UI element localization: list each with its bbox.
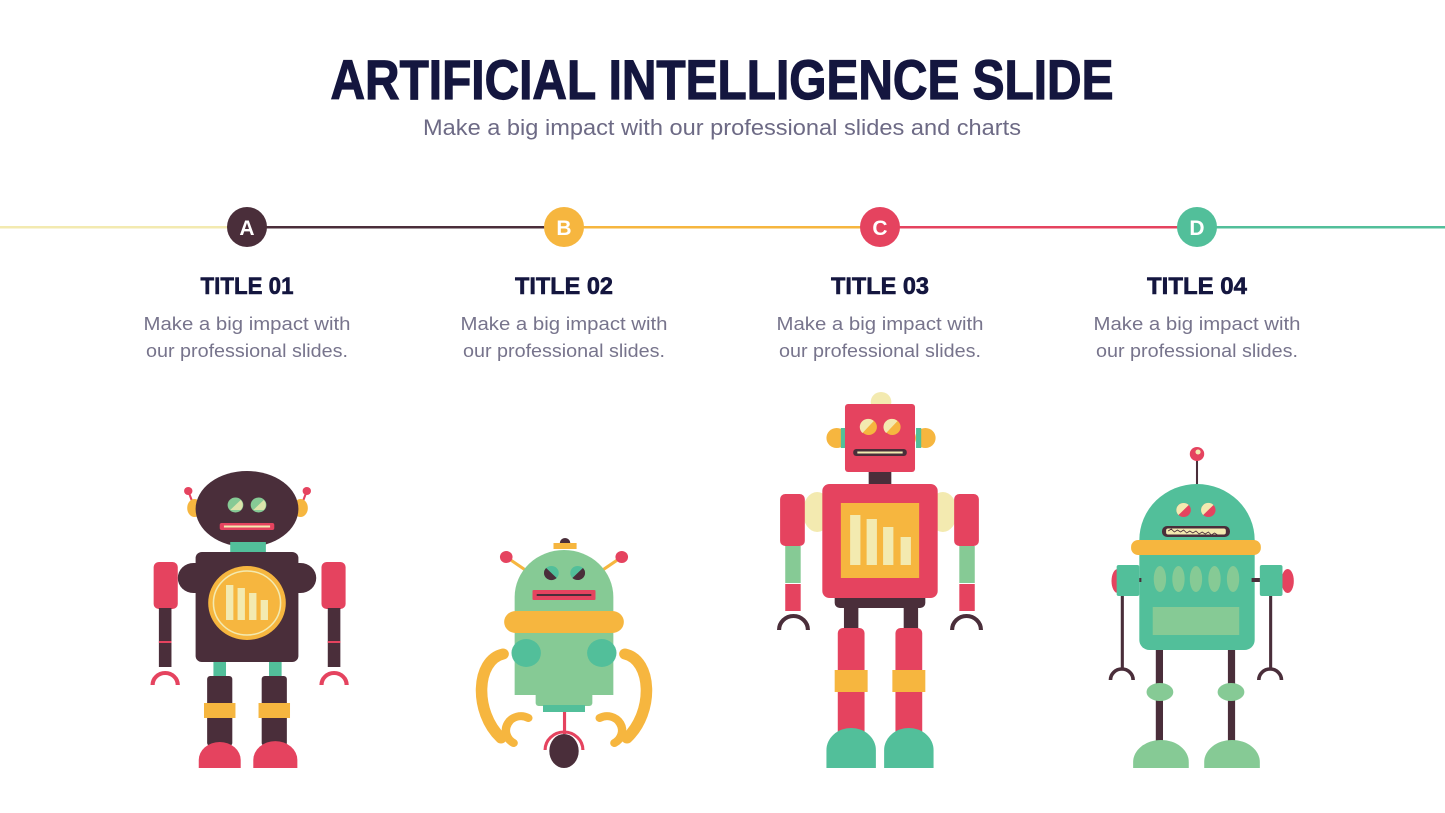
text block 3: our professional slides.	[779, 341, 981, 361]
marker B: B	[556, 217, 572, 240]
marker D	[1177, 207, 1217, 247]
title: ARTIFICIAL INTELLIGENCE SLIDE	[330, 48, 1114, 111]
marker C: C	[872, 217, 888, 240]
marker A: A	[239, 217, 255, 240]
text block 1: our professional slides.	[146, 341, 348, 361]
marker C	[860, 207, 900, 247]
text block 4: TITLE 04	[1147, 273, 1248, 300]
text block 2	[460, 273, 668, 361]
robot D	[1110, 447, 1294, 768]
robot A	[153, 471, 347, 768]
timeline	[0, 226, 1445, 228]
text block 3: TITLE 03	[831, 273, 929, 300]
text block 4: our professional slides.	[1096, 341, 1298, 361]
text block 4	[1094, 273, 1300, 361]
text block 3: Make a big impact with	[776, 314, 984, 334]
text block 1	[144, 273, 350, 361]
text block 1: TITLE 01	[200, 273, 294, 300]
text block 2: our professional slides.	[463, 341, 665, 361]
marker B	[544, 207, 584, 247]
text block 2: TITLE 02	[515, 273, 613, 300]
text block 4: Make a big impact with	[1094, 314, 1300, 334]
robot B	[482, 538, 646, 768]
subtitle: Make a big impact with our professional slides and charts	[423, 115, 1021, 140]
text block 1: Make a big impact with	[144, 314, 350, 334]
marker D: D	[1189, 217, 1205, 240]
robot C	[779, 392, 981, 768]
text block 2: Make a big impact with	[460, 314, 668, 334]
text block 3	[776, 273, 984, 361]
marker A	[227, 207, 267, 247]
